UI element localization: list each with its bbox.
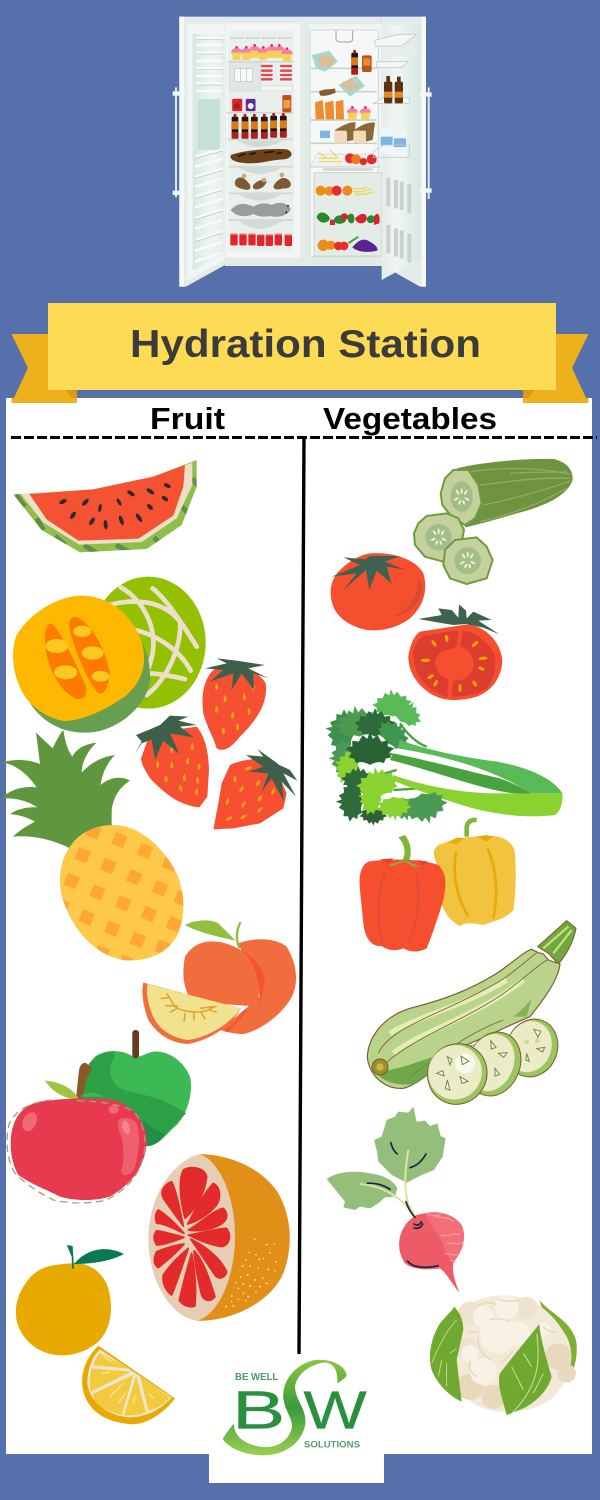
ribbon tail: right: [523, 334, 588, 403]
logo: Be Well Solutions: [223, 1360, 367, 1455]
icon: zucchini: [367, 921, 576, 1088]
vertical column divider: [299, 437, 304, 1354]
column heading: Fruit: Fruit: [150, 401, 225, 436]
logo letter: W: W: [303, 1380, 367, 1440]
icon: red apple: [7, 1063, 147, 1203]
icon: cucumber: [414, 459, 573, 584]
fruit lower group: [16, 1154, 290, 1424]
icon: strawberry right: [213, 749, 297, 829]
right door: [373, 17, 426, 287]
icon: radish: [327, 1107, 464, 1293]
refrigerator illustration: [173, 17, 432, 287]
icon: pineapple body: [60, 825, 184, 960]
icon: strawberry top: [202, 658, 268, 750]
ribbon tail: left: [12, 334, 77, 403]
logo text: BE WELL: BE WELL: [235, 1372, 278, 1383]
dashed divider: [11, 436, 597, 439]
icon: red pepper: [360, 835, 445, 951]
icon: yellow pepper: [434, 820, 516, 926]
panel: white chart background: [6, 398, 592, 1454]
icon: whole tomato: [331, 553, 425, 630]
icon: orange: [16, 1245, 124, 1355]
icon: lemon slice: [82, 1346, 175, 1424]
column heading: Vegetables: Vegetables: [323, 401, 497, 436]
icon: strawberry left: [135, 716, 209, 807]
icon: peach: [183, 920, 296, 1034]
fruit middle group: [7, 823, 296, 1203]
icon: grapefruit: [148, 1154, 290, 1321]
right handle: [420, 87, 432, 199]
food on fridge shelves: [312, 50, 380, 252]
icon: celery: [322, 687, 563, 829]
vegetable lower group: [327, 1107, 577, 1415]
icon: watermelon: [13, 460, 200, 553]
title banner: [48, 303, 556, 390]
vegetable upper group: [322, 459, 573, 829]
logo swoosh: S: [223, 1360, 347, 1455]
icon: green apple: [81, 1030, 191, 1146]
left door: [179, 17, 225, 287]
left handle: [173, 87, 185, 197]
vegetable middle group: [360, 820, 576, 1115]
logo letter: B: B: [232, 1380, 285, 1440]
icon: cauliflower: [430, 1295, 577, 1415]
icon: green melon: [91, 577, 206, 709]
title: Hydration Station: [130, 323, 481, 366]
panel: logo tab: [209, 1440, 384, 1483]
icon: peach slice: [142, 983, 241, 1044]
icon: cut tomato: [408, 604, 502, 700]
food on freezer shelves: [230, 44, 293, 246]
fridge body: [225, 17, 382, 266]
icon: zucchini slices: [417, 1012, 566, 1115]
fruit upper group: [1, 460, 297, 848]
icon: cantaloupe half: [13, 596, 150, 733]
icon: pineapple leaves: [1, 730, 130, 848]
logo text: SOLUTIONS: SOLUTIONS: [304, 1439, 360, 1449]
ribbon tail overlaps: [12, 398, 588, 403]
